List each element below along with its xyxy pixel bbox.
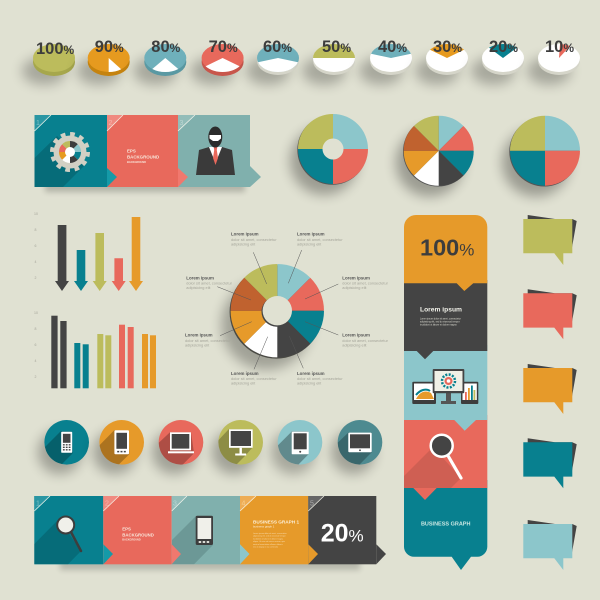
- pie chart: eight slices: [396, 116, 474, 197]
- top step banner: [34, 115, 261, 192]
- icon circle: desktop monitor: [206, 420, 263, 480]
- pie 80%: 80%: [151, 38, 181, 56]
- callout top right: dolor sit amet, consectetur: [297, 237, 343, 242]
- icon circle: mobile phone: [31, 420, 89, 483]
- arrow bar chart: [34, 212, 143, 291]
- step 1 panel with magnifier: [34, 496, 103, 564]
- pie chart: donut four quarters: [290, 114, 368, 195]
- dark section with text: adipisicing elit, sed do eiusmod tempor: [420, 320, 460, 323]
- device icon circles row: [31, 420, 382, 484]
- icon circle: wide tablet: [326, 420, 382, 480]
- callout bottom right: adipisicing elit: [297, 381, 322, 386]
- step 3 panel with businessman: [178, 115, 261, 187]
- light blue section with monitors: [404, 345, 487, 431]
- icon: magnifier: [431, 435, 461, 478]
- pie 10%: 10%: [545, 38, 574, 56]
- callout bottom left: dolor sit amet, consectetur: [231, 376, 277, 381]
- callout left lower: dolor sit amet, consectetur: [185, 338, 231, 343]
- central donut chart with callouts: [185, 232, 389, 386]
- arrow bar chart: 2: [34, 276, 36, 280]
- step 4 panel with text: aliqua. Ut enim ad minim veniam, quis: [253, 540, 285, 543]
- grouped bar chart: [34, 311, 156, 388]
- step 2 panel: EPS: [122, 527, 131, 532]
- icon: phone: [196, 516, 213, 545]
- grouped bar chart: 8: [34, 327, 36, 331]
- pie 100%: [22, 40, 75, 85]
- callout top left: dolor sit amet, consectetur: [231, 237, 277, 242]
- speech bubbles: [523, 215, 577, 570]
- callout left upper: dolor sit amet, consectetur: [186, 280, 233, 285]
- step 3 panel with businessman: 3: [180, 120, 184, 127]
- orange section with 100%: [404, 215, 487, 291]
- step 2 panel: BACKGROUND: [127, 154, 159, 160]
- step 2 panel: BACKGROUND: [122, 538, 141, 542]
- callout top left: Lorem ipsum: [231, 232, 259, 237]
- donut chart: [221, 264, 324, 370]
- step 4 panel with text: 4: [242, 500, 246, 508]
- arrow bar chart: 10: [34, 212, 38, 216]
- orange section with 100%: 100%: [420, 235, 474, 261]
- bubble teal: [523, 438, 577, 488]
- icon: businessman: [196, 126, 235, 175]
- pie 40%: [359, 38, 412, 85]
- pie 30%: 30%: [433, 38, 462, 56]
- callout top left: adipisicing elit: [231, 242, 256, 246]
- icon circle: smartphone: [85, 420, 144, 483]
- icon: magnifier: [57, 516, 81, 551]
- pie 20%: [471, 38, 524, 85]
- tall vertical panel: [404, 215, 487, 570]
- pie 20%: 20%: [489, 38, 518, 56]
- pie 70%: [191, 38, 244, 85]
- step 1 panel with gear: [34, 115, 107, 187]
- step 2 panel: 2: [105, 500, 109, 508]
- icon: gear: [52, 134, 88, 170]
- step 5 panel with 20%: 20%: [321, 520, 364, 548]
- callout right upper: adipisicing elit: [342, 285, 367, 290]
- grouped bar chart: 4: [34, 359, 36, 363]
- step 4 panel with text: BUSINESS GRAPH 1: [253, 519, 299, 524]
- step 1 panel with magnifier: 1: [36, 500, 40, 508]
- step 4 panel with text: [240, 496, 308, 564]
- icon circle: tablet: [266, 420, 322, 480]
- step 2 panel: BACKGROUND: [122, 532, 154, 538]
- step 3 panel with phone: 3: [173, 500, 177, 508]
- pie 60%: 60%: [263, 38, 292, 56]
- dark section with text: Lorem ipsum: [420, 307, 462, 314]
- step 4 panel with text: Lorem ipsum dolor sit amet, consectetur: [253, 532, 287, 535]
- bubble orange: [523, 364, 577, 414]
- percentage pies row: [22, 38, 580, 85]
- step 2 panel: [103, 496, 172, 564]
- icon: devices: [412, 369, 478, 404]
- bubble coral: [523, 289, 577, 339]
- step 5 panel with 20%: 5: [310, 500, 314, 508]
- callout right upper: dolor sit amet, consectetur: [342, 280, 389, 285]
- pie 90%: [77, 38, 130, 85]
- step 2 panel: [107, 115, 178, 187]
- pie 10%: [527, 38, 580, 85]
- grouped bar chart: 10: [34, 311, 38, 315]
- pie 80%: [133, 38, 186, 85]
- step 2 panel: 2: [108, 120, 112, 127]
- step 3 panel with phone: [172, 496, 240, 564]
- bubble light blue: [523, 520, 577, 570]
- step 1 panel with gear: 1: [36, 120, 40, 127]
- dark section with text: Lorem ipsum dolor sit amet, consectetur: [420, 317, 461, 320]
- step 5 panel with 20%: [308, 496, 386, 564]
- pie chart: four quarters: [502, 116, 580, 197]
- step 4 panel with text: nisi ut aliquip ex ea commodo: [253, 546, 278, 548]
- callout right upper: Lorem ipsum: [342, 275, 370, 280]
- pie 60%: [246, 38, 299, 85]
- callout bottom right: dolor sit amet, consectetur: [297, 376, 343, 381]
- dark section with text: incididunt ut labore et dolore magna: [420, 324, 457, 326]
- callout top right: Lorem ipsum: [297, 232, 325, 237]
- callout bottom left: Lorem ipsum: [231, 371, 259, 376]
- step 4 panel with text: nostrud exercitation ullamco laboris: [253, 543, 283, 546]
- icon circle: laptop: [146, 420, 204, 480]
- teal section: BUSINESS GRAPH: [421, 521, 470, 527]
- step 4 panel with text: business graph 1: [253, 524, 275, 528]
- callout right lower: Lorem ipsum: [342, 333, 370, 338]
- arrow bar chart: 4: [34, 260, 36, 264]
- pie 100%: 100%: [36, 40, 75, 58]
- arrow bar chart: 8: [34, 228, 36, 232]
- arrow bar chart: 6: [34, 244, 36, 248]
- pie 50%: 50%: [322, 38, 351, 56]
- step 2 panel: BACKGROUND: [127, 160, 146, 164]
- coral section with magnifier: [404, 415, 487, 500]
- grouped bar chart: 2: [34, 375, 36, 379]
- bottom step banner: [34, 496, 386, 570]
- pie 40%: 40%: [378, 38, 407, 56]
- pie 70%: 70%: [209, 38, 238, 56]
- callout left lower: Lorem ipsum: [185, 333, 213, 338]
- teal section: [404, 480, 487, 570]
- bubble olive: [523, 215, 577, 265]
- pie 30%: [415, 38, 468, 85]
- callout bottom right: Lorem ipsum: [297, 371, 325, 376]
- callout left upper: Lorem ipsum: [186, 275, 214, 280]
- grouped bar chart: 6: [34, 343, 36, 347]
- callout left lower: adipisicing elit: [185, 342, 210, 348]
- callout left upper: adipisicing elit: [186, 285, 211, 290]
- callout top right: adipisicing elit: [297, 242, 322, 246]
- pie 50%: [302, 38, 355, 85]
- pie 90%: 90%: [95, 38, 124, 56]
- callout bottom left: adipisicing elit: [231, 381, 256, 386]
- leader lines: [217, 250, 338, 369]
- dark section with text: [404, 280, 487, 359]
- callout right lower: dolor sit amet, consectetur: [342, 338, 389, 343]
- step 2 panel: EPS: [127, 148, 136, 154]
- step 4 panel with text: incididunt ut labore et dolore magna: [253, 537, 284, 540]
- callout right lower: adipisicing elit: [342, 342, 367, 348]
- step 4 panel with text: adipisicing elit, sed do eiusmod tempor: [253, 535, 286, 538]
